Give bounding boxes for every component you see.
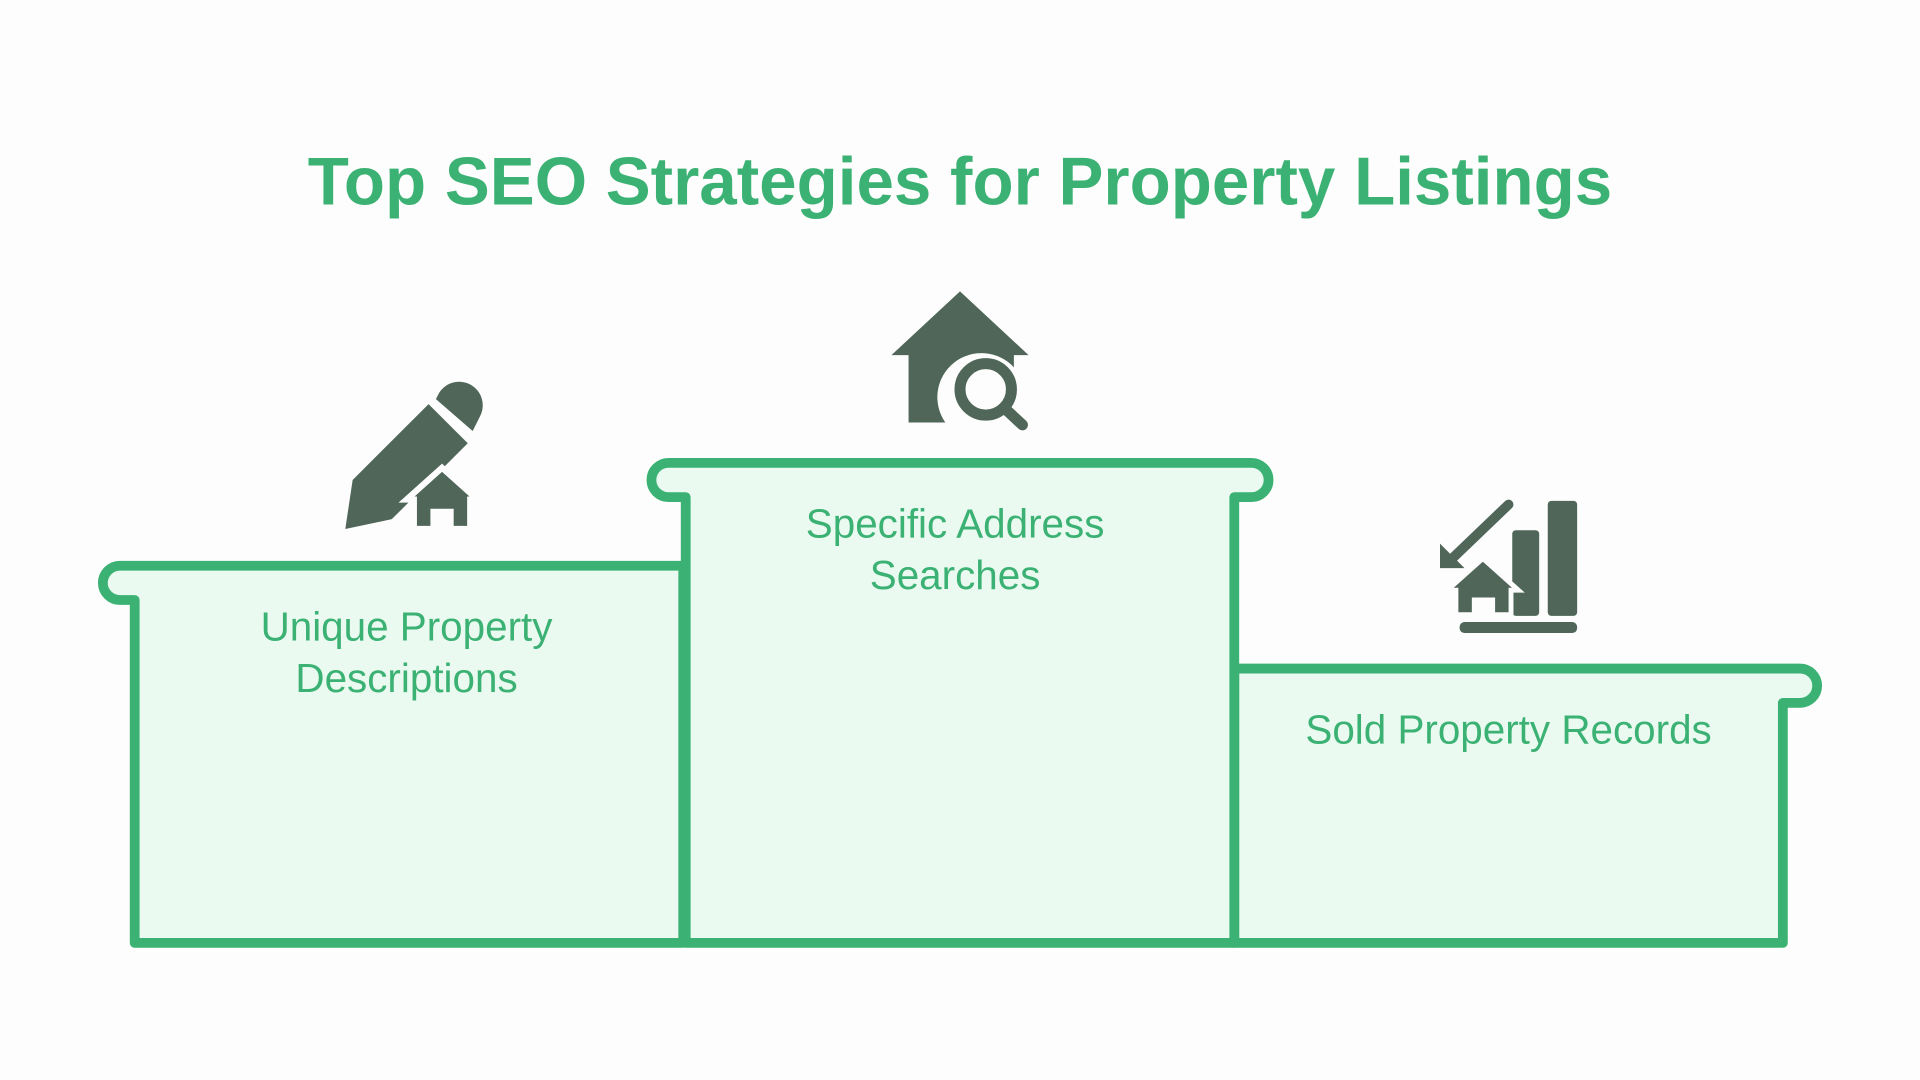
icon: chart with falling arrow and house — [1440, 501, 1577, 633]
text: specific address searches: Searches — [870, 552, 1040, 598]
panel: specific address searches — [651, 463, 1269, 943]
panel: unique property descriptions — [103, 566, 683, 943]
icon: pencil with house — [345, 382, 483, 529]
icon: house with magnifier — [891, 291, 1029, 425]
title: Top SEO Strategies for Property Listings — [308, 144, 1612, 219]
text: unique property descriptions: Descriptions — [295, 655, 518, 701]
panel: sold property records — [1234, 669, 1817, 943]
text: specific address searches: Specific Address — [806, 501, 1104, 547]
text: sold property records: Sold Property Records — [1305, 706, 1712, 752]
text: unique property descriptions: Unique Property — [261, 603, 553, 649]
